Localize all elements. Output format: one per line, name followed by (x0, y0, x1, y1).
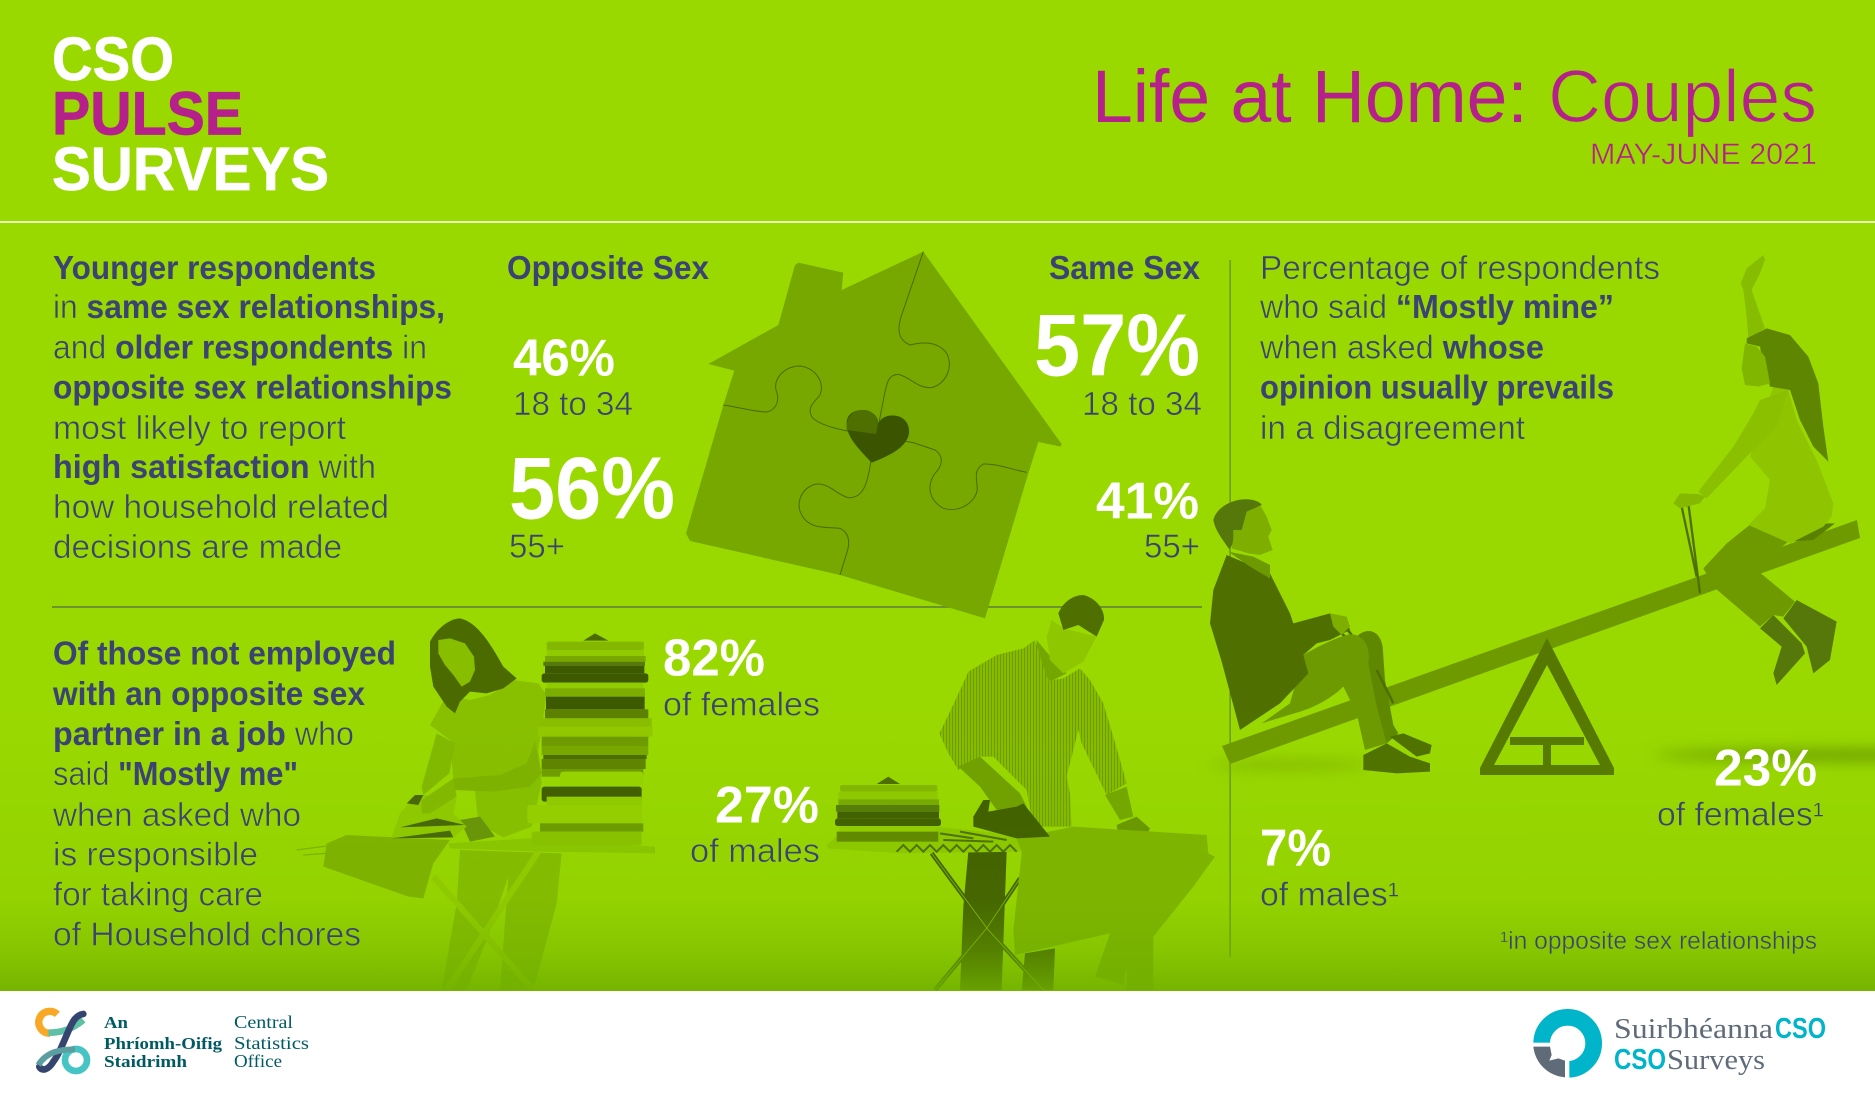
text: household chores: said "Mostly me" (53, 755, 298, 792)
shirt on board (1013, 827, 1215, 990)
forearms (958, 757, 1027, 810)
horizontal divider (52, 606, 1202, 608)
ground shadow (1210, 761, 1370, 769)
logo: CSO Pulse Surveys: CSO (52, 25, 174, 93)
text: whose opinion prevails: when asked whose (1259, 328, 1544, 366)
face (1047, 620, 1097, 673)
text: household chores: for taking care (53, 876, 263, 912)
text: whose opinion prevails: in a disagreement (1260, 409, 1525, 446)
hand (422, 778, 457, 813)
text: household decisions: opposite sex relationships (53, 368, 452, 406)
hair (1058, 595, 1104, 637)
english name: Central (234, 1012, 293, 1032)
shoes (1363, 733, 1432, 773)
english name: Office (234, 1051, 282, 1071)
heart highlight (847, 410, 878, 434)
seesaw handle (1338, 628, 1393, 703)
front leg (1262, 634, 1387, 750)
face (1742, 343, 1770, 387)
board leg highlights (932, 853, 1043, 990)
trousers (442, 850, 562, 990)
vertical divider (1230, 260, 1231, 957)
board cover pattern (897, 832, 1017, 852)
towel (323, 835, 450, 898)
text: whose opinion prevails: opinion usually prevails (1260, 368, 1614, 406)
wordmark (1614, 1013, 1826, 1076)
hand (1330, 613, 1350, 635)
stat: males chores: of males (690, 832, 820, 869)
image: seesaw (1210, 255, 1875, 775)
trousers (960, 852, 1055, 990)
text: household chores: Of those not employed (53, 634, 396, 672)
text: household decisions: in same sex relationships, (53, 288, 445, 325)
hand (1117, 817, 1150, 835)
logo: Central Statistics Office (38, 1011, 309, 1071)
face (438, 638, 475, 687)
text: household decisions: most likely to report (53, 409, 346, 446)
t-shirt (430, 680, 547, 837)
right shadow (1655, 749, 1875, 761)
stat: females opinion: 23% (1714, 740, 1817, 798)
fulcrum (1480, 638, 1614, 775)
striped shirt (939, 640, 1127, 827)
logo: CSO Pulse Surveys: SURVEYS (52, 135, 329, 203)
legs (1703, 523, 1795, 627)
irish name (104, 1013, 223, 1071)
ironing board legs (433, 852, 538, 990)
title: Life at Home: Couples (1092, 55, 1817, 138)
stat: males opinion: of males¹ (1260, 876, 1399, 912)
back leg (1357, 631, 1398, 743)
wordmark: CSO (1614, 1044, 1666, 1076)
text: household chores: partner in a job who (53, 715, 354, 752)
irish name: An (104, 1013, 129, 1032)
text: household chores: with an opposite sex (52, 675, 366, 712)
header rule (0, 221, 1875, 223)
puzzle seams (723, 252, 1027, 575)
text: household decisions (53, 249, 452, 565)
text: household decisions: how household related (53, 488, 389, 525)
text: household decisions: decisions are made (53, 528, 342, 565)
stats: same sex: Same Sex (1049, 249, 1201, 286)
stack of clothes (835, 777, 941, 842)
stats: opposite sex: Opposite Sex (507, 249, 710, 286)
image: man ironing (827, 595, 1215, 990)
stats: same sex: 55+ (1144, 528, 1200, 564)
hair (1213, 499, 1262, 549)
text: household chores (52, 634, 396, 952)
stats: opposite sex: 55+ (509, 528, 565, 564)
stat: females opinion (1657, 740, 1824, 832)
jacket (1210, 555, 1350, 730)
handle (1682, 503, 1700, 593)
logo: CSO Pulse Surveys (52, 25, 329, 203)
boots (1760, 600, 1837, 685)
hand (1673, 493, 1705, 508)
logo: CSO Pulse Surveys: PULSE (52, 80, 243, 148)
hair (430, 618, 517, 713)
stack of clothes (527, 633, 652, 845)
image: woman ironing (297, 618, 655, 990)
stats: same sex: 41% (1096, 472, 1199, 530)
stat: females chores: 82% (663, 630, 765, 688)
footnote: ¹in opposite sex relationships (1500, 927, 1817, 955)
stat: males chores: 27% (715, 776, 819, 834)
plank (1222, 520, 1860, 764)
folded cloth (460, 817, 495, 842)
face (1232, 506, 1273, 555)
text: whose opinion prevails (1259, 249, 1660, 446)
neck (1037, 640, 1067, 682)
stats: same sex: 57% (1034, 296, 1200, 394)
image: jigsaw puzzle house (686, 252, 1062, 618)
text: household chores: when asked who (52, 796, 301, 833)
heart (847, 410, 909, 463)
board legs (932, 853, 1043, 990)
stat: males opinion (1260, 820, 1399, 912)
text: whose opinion prevails: Percentage of respondents (1260, 249, 1660, 286)
text: household decisions: Younger respondents (53, 249, 376, 286)
english name: Statistics (234, 1033, 309, 1053)
stat: females chores (663, 630, 820, 722)
stats: same sex (1034, 249, 1202, 564)
arm (422, 733, 455, 795)
dress (1748, 387, 1833, 543)
stats: opposite sex: 56% (509, 438, 675, 538)
icon: speech ring (1532, 1017, 1594, 1079)
wordmark: Suirbhéanna (1614, 1013, 1773, 1045)
stat: females chores: of females (663, 686, 820, 722)
iron (973, 800, 1050, 838)
woman on seesaw (1673, 255, 1837, 685)
stats: same sex: 18 to 34 (1082, 385, 1202, 422)
icon: CSO knot (38, 1011, 87, 1071)
text: household decisions: high satisfaction with (53, 448, 376, 485)
text: household chores: of Household chores (53, 916, 361, 952)
hair (1747, 328, 1828, 462)
english name (234, 1012, 309, 1071)
irish name: Staidrimh (104, 1052, 188, 1071)
wordmark: CSO (1775, 1013, 1826, 1045)
logo: CSO Surveys (1532, 1013, 1826, 1079)
stats: opposite sex (507, 249, 710, 564)
stat: females opinion: of females¹ (1657, 796, 1824, 832)
raised arm (1741, 255, 1765, 338)
collar (1228, 552, 1270, 578)
iron (392, 795, 467, 837)
stats: opposite sex: 46% (513, 330, 615, 388)
wordmark: Surveys (1667, 1044, 1765, 1076)
sleeve (1698, 390, 1788, 498)
text: household decisions: and older respondents in (53, 328, 427, 366)
stat: males chores (690, 776, 820, 869)
stats: opposite sex: 18 to 34 (513, 385, 633, 422)
text: whose opinion prevails: who said “Mostly mine” (1259, 288, 1614, 325)
stat: males opinion: 7% (1260, 820, 1331, 878)
footer (0, 991, 1875, 1095)
seat (1790, 523, 1835, 542)
text: household chores: is responsible (53, 836, 258, 872)
bottom gradient (0, 700, 1875, 991)
man on seesaw (1210, 499, 1432, 773)
ironing board (448, 838, 655, 853)
ironing board (827, 827, 1020, 853)
irish name: Phríomh-Oifig (104, 1034, 223, 1053)
date: MAY-JUNE 2021 (1590, 138, 1817, 171)
